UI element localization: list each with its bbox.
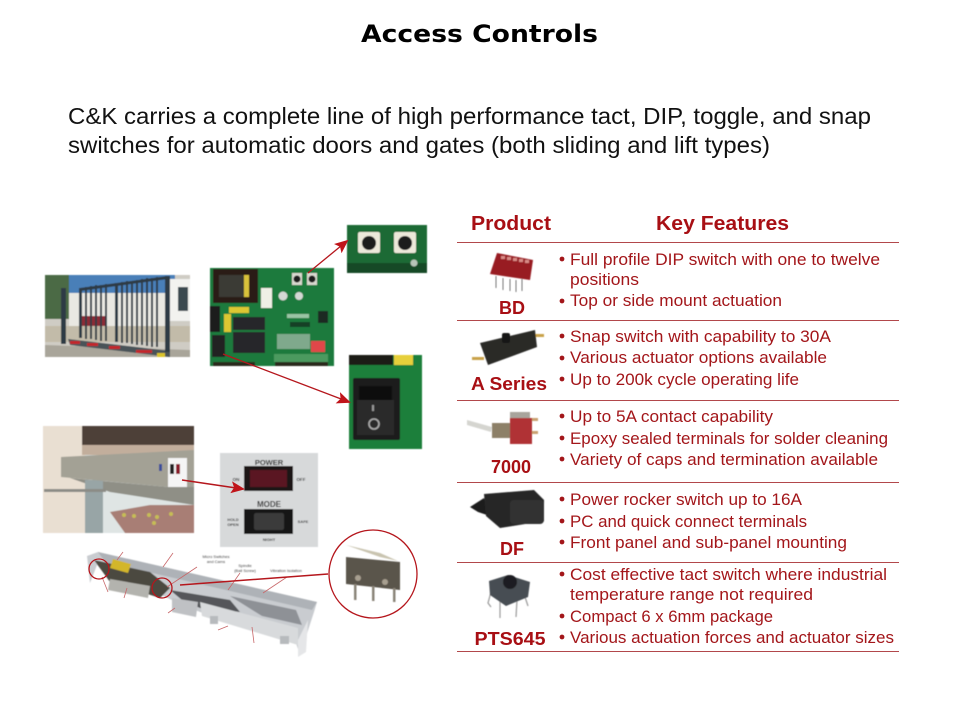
photo: power and mode control panel: ON — [233, 477, 239, 482]
row: PTS645 — [474, 566, 894, 649]
arrow: board to tact buttons — [308, 241, 347, 273]
photo: sliding gate — [45, 275, 190, 357]
row: DF — [470, 490, 847, 559]
row: PTS645: temperature range not required — [570, 586, 813, 604]
row: DF: DF — [500, 539, 524, 559]
icon: red DIP switch — [490, 253, 533, 292]
callout: pointer lines on cutaway — [102, 552, 287, 643]
row: 7000: 7000 — [491, 457, 531, 477]
icon: black snap switch — [472, 330, 544, 365]
diagram: door operator cutaway: Spindle — [238, 563, 252, 568]
row: BD: Full profile DIP switch with one to twelve — [570, 251, 880, 269]
row: PTS645: Various actuation forces and actuator sizes — [570, 629, 894, 647]
table headers: Product — [471, 213, 551, 235]
row: 7000: Up to 5A contact capability — [570, 408, 774, 426]
icon: tact switch — [488, 575, 530, 618]
photo: power and mode control panel: POWER — [255, 458, 284, 467]
row: A Series: Up to 200k cycle operating life — [570, 371, 799, 389]
row: BD: positions — [570, 271, 639, 289]
icon: toggle switch — [467, 412, 538, 444]
row: 7000 — [467, 408, 888, 477]
photo: power and mode control panel: OPEN — [227, 522, 239, 527]
intro text: C&K carries a complete line of high performance tact, DIP, toggle, and snap — [68, 103, 871, 129]
photo: controller circuit board — [210, 268, 334, 366]
photo: power and mode control panel: NIGHT — [263, 537, 276, 542]
diagram: door operator cutaway: and Cams — [207, 559, 225, 564]
diagram: door operator cutaway: (Ball Screw) — [234, 568, 256, 573]
row: BD — [490, 251, 880, 318]
intro text: switches for automatic doors and gates (both sliding and lift types) — [68, 132, 770, 158]
row: PTS645: Compact 6 x 6mm package — [570, 608, 773, 626]
row: A Series: A Series — [471, 374, 547, 394]
row: DF: PC and quick connect terminals — [570, 513, 807, 531]
row: PTS645: Cost effective tact switch where industrial — [570, 566, 887, 584]
row: 7000: Epoxy sealed terminals for solder cleaning — [570, 430, 888, 448]
diagram: door operator cutaway: Micro Switches — [203, 554, 229, 559]
icon: power rocker switch — [470, 490, 544, 528]
photo: power and mode control panel: HOLD — [227, 517, 239, 522]
row: A Series — [471, 328, 831, 394]
row: PTS645: PTS645 — [474, 629, 546, 649]
photo: power and mode control panel: OFF — [296, 477, 306, 482]
diagram: door operator cutaway — [87, 552, 317, 657]
photo: power and mode control panel: MODE — [257, 500, 282, 509]
arrow: board to rocker switch — [223, 354, 349, 402]
row: 7000: Variety of caps and termination available — [570, 451, 878, 469]
title: Access Controls — [361, 20, 598, 48]
row: DF: Power rocker switch up to 16A — [570, 491, 802, 509]
callout: red circles and leader on cutaway — [89, 559, 328, 598]
photo: power and mode control panel: SAFE — [298, 519, 309, 524]
row: BD: Top or side mount actuation — [570, 292, 782, 310]
intro text — [68, 103, 871, 158]
arrow: operator to power panel — [182, 480, 243, 489]
callout: snap switch magnified — [329, 530, 417, 618]
row: A Series: Snap switch with capability to 30A — [570, 328, 831, 346]
row: DF: Front panel and sub-panel mounting — [570, 534, 847, 552]
row: A Series: Various actuator options available — [570, 349, 827, 367]
diagram: door operator cutaway: Vibration Isolation — [270, 568, 302, 573]
photo: tact buttons close-up — [347, 225, 427, 273]
photo: power and mode control panel — [220, 453, 318, 547]
photo: door operator header — [43, 426, 194, 533]
table — [457, 213, 899, 652]
photo: rocker switch close-up — [349, 355, 422, 449]
table headers — [471, 213, 789, 235]
table headers: Key Features — [656, 213, 789, 235]
row: BD: BD — [499, 298, 525, 318]
